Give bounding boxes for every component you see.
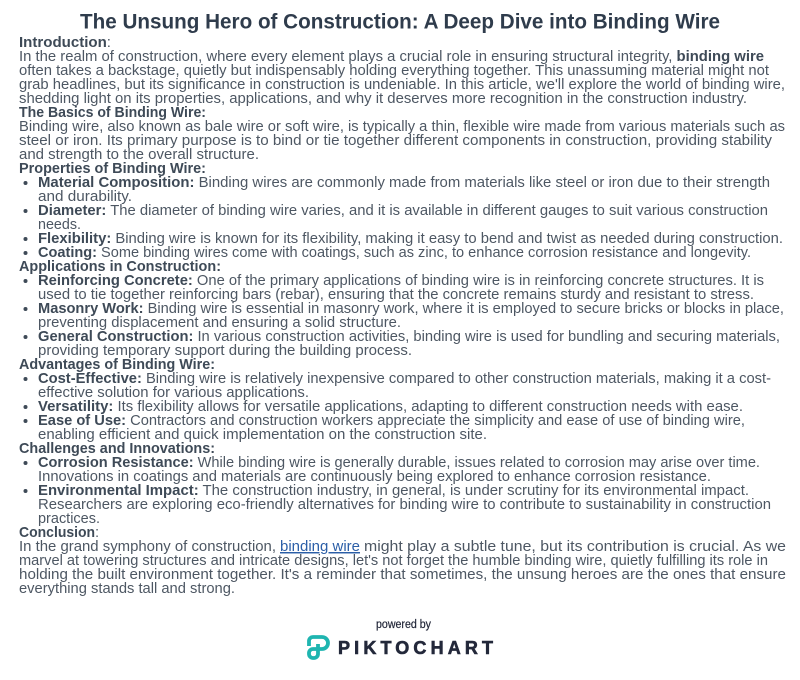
section: conclusion: Conclusion: — [19, 525, 99, 541]
section: conclusion: everything stands tall and strong. — [19, 581, 235, 597]
section: advantages of binding wire: Versatility: Its flexibility allows for versatile applications, adapting to different construction needs with ease. — [38, 399, 743, 415]
section: applications in construction — [19, 259, 784, 359]
section: introduction: often takes a backstage, quietly but indispensably holding everything together. This unassuming material might not — [19, 63, 769, 79]
section: properties of binding wire: and durability. — [38, 189, 132, 205]
section: the basics of binding wire: and strength to the overall structure. — [19, 147, 259, 163]
section: the basics of binding wire: steel or iron. Its primary purpose is to bind or tie together different components in construction, providing stability — [19, 133, 773, 149]
section: advantages of binding wire: Cost-Effective: Binding wire is relatively inexpensive compared to other construction materials, making it a cost- — [38, 371, 771, 387]
section: introduction: In the realm of construction, where every element plays a crucial role in ensuring structural integrity, binding wire — [19, 49, 764, 65]
section: introduction: grab headlines, but its significance in construction is undeniable. In this article, we'll explore the world of binding wire, — [19, 77, 785, 93]
section: properties of binding wire — [19, 161, 783, 261]
section: applications in construction: preventing displacement and ensuring a solid structure. — [38, 315, 401, 331]
section: properties of binding wire: Properties of Binding Wire: — [19, 161, 206, 177]
section: applications in construction: used to tie together reinforcing bars (rebar), ensuring that the concrete remains sturdy and resistant to stress. — [38, 287, 754, 303]
section: advantages of binding wire: enabling efficient and quick implementation on the construction site. — [38, 427, 487, 443]
section: introduction: shedding light on its properties, applications, and why it deserves more recognition in the construction industry. — [19, 91, 747, 107]
powered by piktochart logo: PIKTOCHART — [338, 638, 493, 658]
section: introduction — [19, 35, 785, 107]
section: challenges and innovations — [19, 441, 771, 527]
powered by piktochart logo — [309, 619, 493, 658]
section: applications in construction: General Construction: In various construction activities, binding wire is used for bundling and securing materials, — [38, 329, 780, 345]
section: applications in construction: Reinforcing Concrete: One of the primary applications of binding wire is in reinforcing concrete structures. It is — [38, 273, 764, 289]
section: challenges and innovations: Challenges and Innovations: — [19, 441, 215, 457]
icon: piktochart p mark — [309, 637, 328, 658]
section: properties of binding wire: Flexibility: Binding wire is known for its flexibility, making it easy to bend and twist as needed during construction. — [38, 231, 783, 247]
title: The Unsung Hero of Construction: A Deep Dive into Binding Wire — [80, 10, 720, 34]
section: conclusion: holding the built environment together. It's a reminder that sometimes, the unsung heroes are the ones that ensure — [19, 567, 786, 583]
powered by piktochart logo: powered by — [376, 619, 431, 631]
section: the basics of binding wire — [19, 105, 785, 163]
section: advantages of binding wire: Advantages of Binding Wire: — [19, 357, 215, 373]
section: applications in construction: Masonry Work: Binding wire is essential in masonry work, where it is employed to secure bricks or blocks in place, — [38, 301, 784, 317]
section: properties of binding wire: needs. — [38, 217, 81, 233]
section: advantages of binding wire — [19, 357, 771, 443]
section: challenges and innovations: Corrosion Resistance: While binding wire is generally durable, issues related to corrosion may arise over time. — [38, 455, 760, 471]
section: the basics of binding wire: Binding wire, also known as bale wire or soft wire, is typically a thin, flexible wire made from various materials such as — [19, 119, 785, 135]
section: advantages of binding wire: effective solution for various applications. — [38, 385, 309, 401]
section: properties of binding wire: Diameter: The diameter of binding wire varies, and it is available in different gauges to suit various construction — [38, 203, 768, 219]
section: properties of binding wire: Coating: Some binding wires come with coatings, such as zinc, to enhance corrosion resistance and longevity. — [38, 245, 751, 261]
section: introduction: Introduction: — [19, 35, 111, 51]
section: challenges and innovations: practices. — [38, 511, 100, 527]
section: properties of binding wire: Material Composition: Binding wires are commonly made from materials like steel or iron due to their strength — [38, 175, 770, 191]
section: advantages of binding wire: Ease of Use: Contractors and construction workers appreciate the simplicity and ease of use of binding wire, — [38, 413, 745, 429]
section: the basics of binding wire: The Basics of Binding Wire: — [19, 105, 206, 121]
section: applications in construction: providing temporary support during the building process. — [38, 343, 412, 359]
section: conclusion: binding wire — [280, 539, 360, 555]
section: conclusion: might play a subtle tune, but its contribution is crucial. As we — [364, 539, 786, 555]
section: conclusion — [19, 525, 786, 597]
section: challenges and innovations: Innovations in coatings and materials are continuously being explored to enhance corrosion resistance. — [38, 469, 711, 485]
section: challenges and innovations: Environmental Impact: The construction industry, in general, is under scrutiny for its environmental impact. — [38, 483, 749, 499]
section: conclusion: In the grand symphony of construction, — [19, 539, 276, 555]
section: challenges and innovations: Researchers are exploring eco-friendly alternatives for binding wire to contribute to sustainability in construction — [38, 497, 771, 513]
section: conclusion: marvel at towering structures and intricate designs, let's not forget the humble binding wire, quietly fulfilling its role in — [19, 553, 768, 569]
section: applications in construction: Applications in Construction: — [19, 259, 221, 275]
